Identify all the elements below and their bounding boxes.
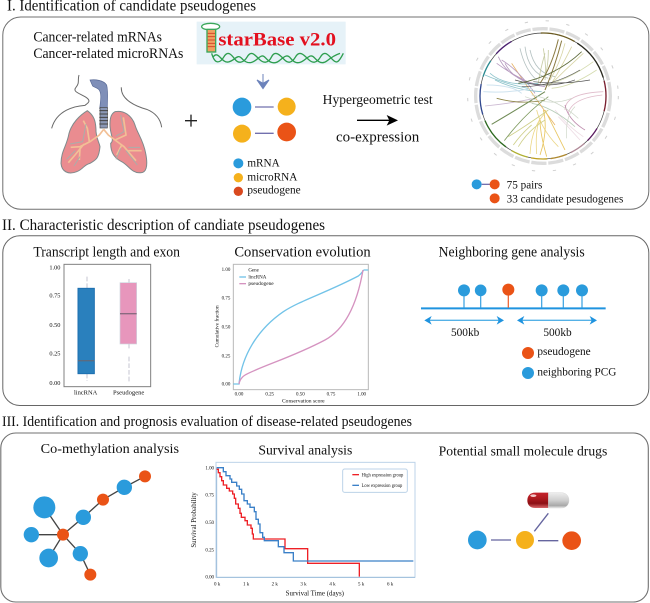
- text and arrow: hypergeometric test, co-expression: co-expression: [336, 129, 419, 145]
- chart: survival analysis: 3 k: [300, 582, 307, 587]
- legend: gene types: pseudogene: [247, 184, 301, 196]
- chart: survival analysis: 1 k: [243, 582, 250, 587]
- chart: box plot: [49, 264, 151, 397]
- panel: disease-related pseudogenes: [1, 433, 648, 602]
- chart: box plot: 0.50: [49, 322, 60, 329]
- chart: survival analysis: 1.00: [205, 466, 215, 471]
- text: cancer-related inputs: Cancer-related microRNAs: [33, 46, 184, 62]
- chart: survival analysis: 4 k: [329, 582, 336, 587]
- diagram: neighboring genes on a chromosome: 500kb: [543, 327, 572, 339]
- chart: survival analysis: Survival Time (days): [286, 589, 345, 598]
- legend: gene types: [233, 158, 301, 196]
- chart: survival analysis: 0.00: [205, 575, 215, 580]
- chart: survival analysis: 2 k: [272, 582, 278, 587]
- diagram: neighboring genes on a chromosome: pseudogene: [537, 344, 591, 358]
- chart: survival analysis: Survival Probability: [189, 492, 198, 548]
- chart: cumulative conservation curves: Gene: [248, 268, 260, 273]
- legend: gene types: microRNA: [247, 171, 298, 183]
- legend: pairs and candidates: 75 pairs: [507, 180, 542, 192]
- chart: survival analysis: Survival analysis: [258, 444, 352, 459]
- chart: cumulative conservation curves: 0.25: [222, 354, 231, 359]
- symbol: plus: [185, 115, 197, 127]
- chart: cumulative conservation curves: 1.00: [222, 268, 231, 273]
- legend: pairs and candidates: 33 candidate pesudogenes: [507, 193, 623, 205]
- chart: cumulative conservation curves: 0.00: [235, 392, 244, 397]
- chart: survival analysis: 0 k: [214, 582, 221, 587]
- heading: conservation evolution: Conservation evolution: [234, 244, 371, 260]
- chart: cumulative conservation curves: 0.00: [222, 383, 231, 388]
- chart: survival analysis: High expression group: [362, 473, 404, 478]
- heading: neighboring gene analysis: Neighboring gene analysis: [439, 244, 585, 260]
- network: gene pairs: [233, 98, 296, 143]
- chart: box plot: Pseudogene: [113, 390, 144, 397]
- diagram: neighboring genes on a chromosome: [421, 284, 617, 379]
- chart: cumulative conservation curves: 0.25: [265, 392, 275, 397]
- text: cancer-related inputs: [33, 30, 184, 62]
- chart: cumulative conservation curves: 0.50: [222, 326, 231, 331]
- section III heading: III. Identification and prognosis evaluation of disease-related pseudogenes: [2, 414, 412, 430]
- chart: cumulative conservation curves: 0.75: [222, 296, 231, 301]
- diagram: neighboring genes on a chromosome: 500kb: [451, 327, 480, 339]
- legend: gene types: mRNA: [247, 158, 280, 170]
- chart: cumulative conservation curves: 0.50: [296, 392, 305, 397]
- diagram: co-methylation network: [24, 442, 179, 581]
- chart: cumulative conservation curves: lincRNA: [248, 275, 267, 280]
- chart: cumulative conservation curves: Conservation score: [282, 399, 326, 404]
- arrow: starBase to network: [257, 74, 269, 89]
- chart: survival analysis: 6 k: [387, 582, 394, 587]
- text: cancer-related inputs: Cancer-related mRNAs: [33, 30, 162, 46]
- panel: identification of candidate pseudogenes: [3, 17, 649, 209]
- chart: survival analysis: 0.50: [205, 521, 215, 526]
- diagram: potential small molecule drugs: Potential small molecule drugs: [439, 444, 607, 459]
- chart: cumulative conservation curves: [216, 264, 368, 404]
- diagram: potential small molecule drugs: [439, 444, 607, 550]
- chart: box plot: 1.00: [49, 264, 60, 271]
- chart: survival analysis: Low expression group: [362, 484, 403, 489]
- text and arrow: hypergeometric test, co-expression: Hypergeometric test: [323, 92, 433, 107]
- panel: characteristic description: [3, 236, 649, 406]
- section II heading: II. Characteristic description of candiate pseudogenes: [2, 217, 325, 234]
- diagram: neighboring genes on a chromosome: neighboring PCG: [537, 365, 617, 379]
- logo: starBase v2.0: starBase v2.0: [218, 29, 336, 50]
- chart: survival analysis: 0.25: [205, 548, 215, 553]
- chart: survival analysis: [189, 444, 415, 598]
- diagram: co-methylation network: Co-methylation analysis: [41, 442, 179, 457]
- chart: box plot: 0.25: [49, 351, 60, 358]
- chart: survival analysis: 0.75: [205, 494, 215, 499]
- chart: box plot: 0.75: [49, 293, 60, 300]
- text and arrow: hypergeometric test, co-expression: [323, 92, 433, 145]
- legend: pairs and candidates: [472, 179, 623, 205]
- chart: cumulative conservation curves: 1.00: [357, 392, 367, 397]
- heading: transcript length and exon: Transcript length and exon: [33, 244, 180, 260]
- chart: cumulative conservation curves: 0.75: [327, 392, 336, 397]
- chart: cumulative conservation curves: pseudogene: [248, 282, 275, 287]
- logo: starBase v2.0: [197, 22, 346, 64]
- icon: lungs: [52, 75, 162, 173]
- chart: survival analysis: 5 k: [358, 582, 365, 587]
- chart: box plot: lincRNA: [74, 390, 98, 397]
- chart: cumulative conservation curves: Cumulative fraction: [216, 305, 221, 347]
- chart: circos plot: [468, 21, 618, 171]
- chart: box plot: 0.00: [49, 380, 60, 387]
